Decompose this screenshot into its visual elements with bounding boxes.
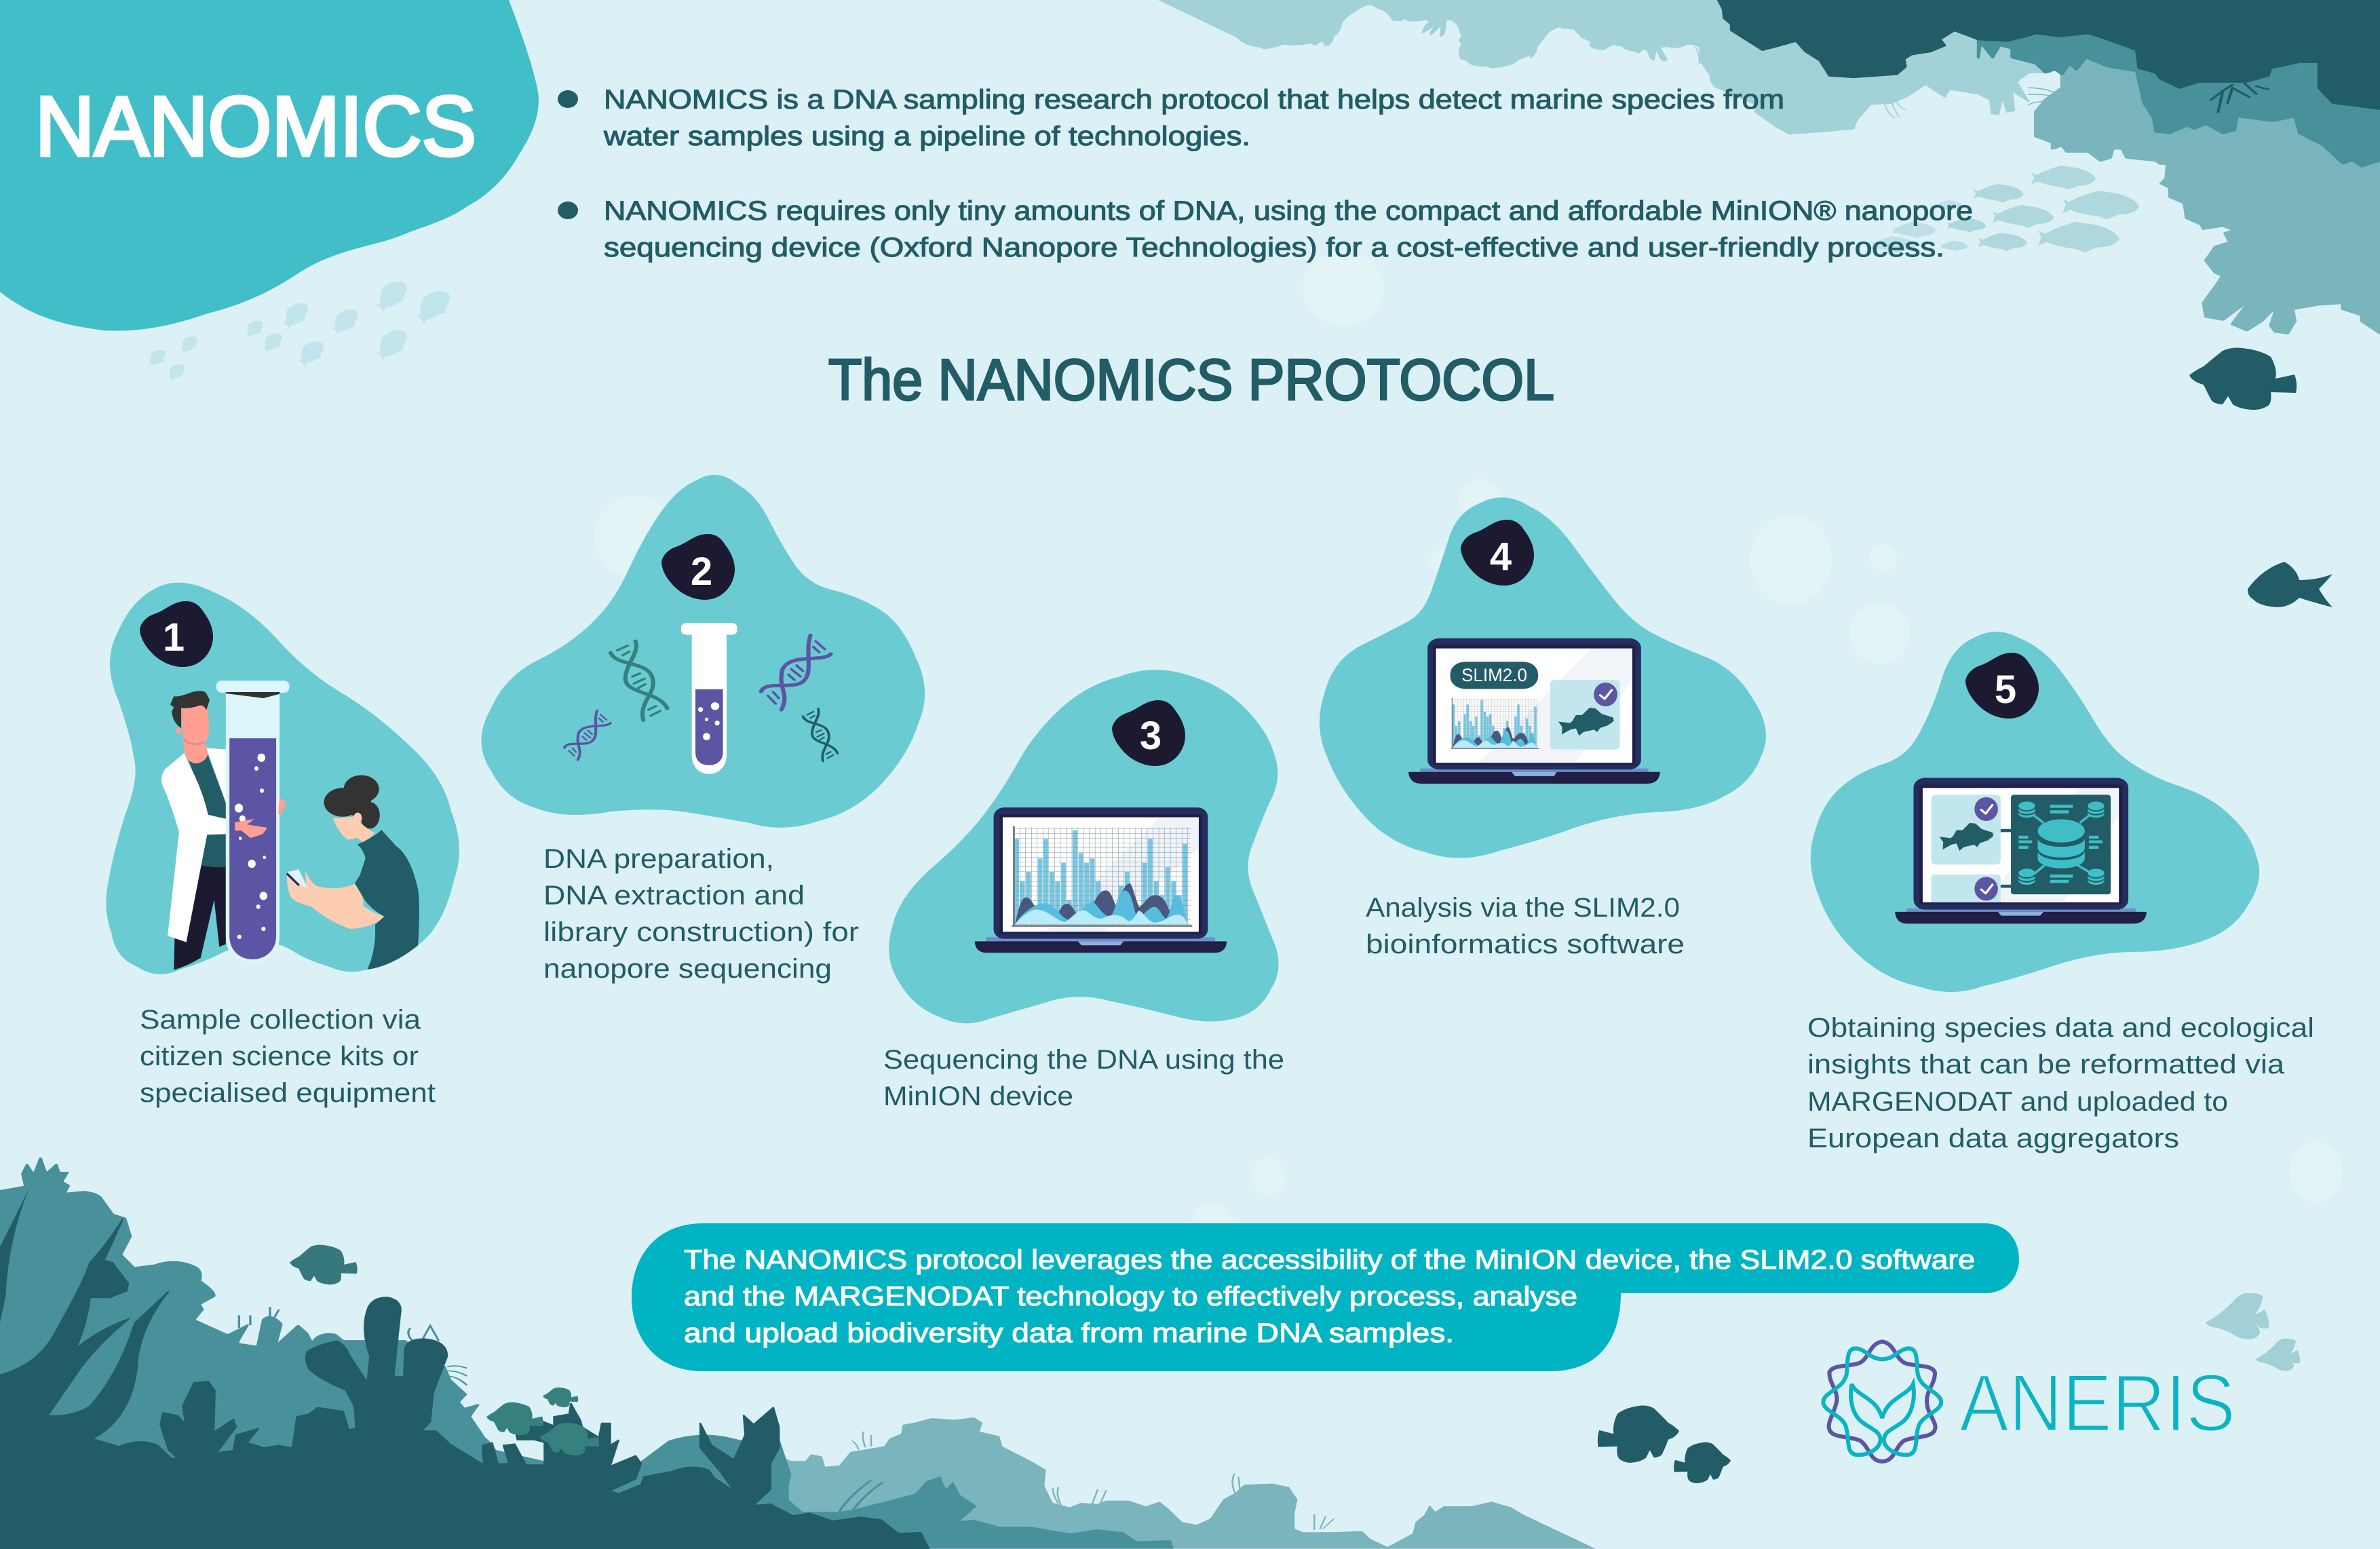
coral layer: fringes and seaweed xyxy=(1695,45,2153,118)
illustration: DNA and test tube xyxy=(564,623,837,774)
blob 5 xyxy=(1815,636,2255,988)
step 4 xyxy=(1324,501,1762,854)
caption 5: Obtaining species data and ecological xyxy=(1807,1013,2314,1043)
caption 3: MinION device xyxy=(883,1082,1073,1111)
step 3 xyxy=(893,674,1275,1019)
ANERIS logo xyxy=(1823,1341,2235,1461)
coral layer: light xyxy=(746,1417,1596,1549)
bullet marker xyxy=(558,202,578,219)
reef fish xyxy=(486,1388,599,1455)
logo wordmark: ANERIS xyxy=(1959,1358,2235,1449)
step 1 xyxy=(110,587,455,970)
caption 1: Sample collection via xyxy=(140,1005,421,1035)
number badge 3: 3 xyxy=(1140,714,1162,758)
illustration: scientist and test tube xyxy=(161,681,290,970)
callout text xyxy=(684,1245,1975,1348)
caption 1: citizen science kits or xyxy=(140,1041,419,1071)
caption 4 xyxy=(1366,893,1685,959)
laptop with SLIM2.0 analysis: SLIM2.0 xyxy=(1461,665,1527,685)
step 2 xyxy=(486,479,921,824)
fish: dark pair xyxy=(1598,1406,1731,1483)
callout panel xyxy=(632,1223,2019,1371)
bullet text 1: water samples using a pipeline of technologies. xyxy=(603,121,1250,151)
coral layer: dark xyxy=(1719,0,2380,109)
bullet marker xyxy=(558,90,578,108)
fish school: top left xyxy=(145,274,457,384)
caption 3: Sequencing the DNA using the xyxy=(883,1045,1284,1075)
callout shape xyxy=(632,1223,2019,1371)
fish: dark right xyxy=(2248,562,2333,607)
caption 1 xyxy=(140,1005,436,1108)
caption 2: nanopore sequencing xyxy=(543,954,832,984)
caption 4: Analysis via the SLIM2.0 xyxy=(1366,893,1680,923)
caption 5: insights that can be reformatted via xyxy=(1807,1050,2285,1079)
caption 5 xyxy=(1807,1013,2314,1153)
fish: light pair xyxy=(2206,1293,2300,1371)
laptop with SLIM2.0 analysis xyxy=(1408,638,1660,784)
bullet text 2 xyxy=(558,196,1973,263)
bubbles xyxy=(595,251,2342,1239)
caption 2: DNA extraction and xyxy=(543,881,805,911)
fish: teal left xyxy=(290,1245,358,1284)
caption 2: DNA preparation, xyxy=(543,844,774,874)
coral layer: mid xyxy=(0,1158,788,1549)
number badge 4 xyxy=(1461,520,1534,586)
caption 2 xyxy=(543,844,859,984)
caption 5: European data aggregators xyxy=(1807,1124,2179,1153)
dna helix teal large xyxy=(611,641,667,720)
bullet text 1: NANOMICS is a DNA sampling research protocol that helps detect marine species from xyxy=(604,85,1784,115)
caption 4: bioinformatics software xyxy=(1366,930,1685,959)
callout text: and the MARGENODAT technology to effectively process, analyse xyxy=(684,1282,1577,1312)
number badge 1 xyxy=(140,601,213,667)
coral layer: mid mound xyxy=(746,1434,1174,1549)
coral layer: mid blue xyxy=(2036,0,2380,333)
laptop with sequencing chart xyxy=(975,807,1227,953)
step 5 xyxy=(1815,636,2255,988)
coral layer: dark seaweed and rocks xyxy=(0,1188,929,1549)
coral: bottom reef xyxy=(0,1158,1596,1549)
coral layer: lightest top xyxy=(1159,0,2060,134)
title blob xyxy=(0,0,539,331)
callout text: and upload biodiversity data from marine DNA samples. xyxy=(684,1318,1454,1348)
callout text: The NANOMICS protocol leverages the accessibility of the MinION device, the SLIM2.0 software xyxy=(684,1245,1975,1275)
number badge 1: 1 xyxy=(163,615,185,659)
title panel xyxy=(0,0,539,331)
bullet text 2: sequencing device (Oxford Nanopore Technologies) for a cost-effective and user-friendly process. xyxy=(604,233,1944,263)
dna helix purple small xyxy=(564,710,611,760)
number badge 2 xyxy=(661,534,735,600)
number badge 5: 5 xyxy=(1995,668,2016,712)
blob 1 xyxy=(110,587,455,970)
caption 3 xyxy=(883,1045,1284,1111)
blob 3 xyxy=(893,674,1275,1019)
blob 4 xyxy=(1324,501,1762,854)
bullet text 1 xyxy=(558,85,1784,151)
number badge 3 xyxy=(1112,700,1185,766)
caption 5: MARGENODAT and uploaded to xyxy=(1807,1087,2228,1117)
dna helix teal small xyxy=(803,709,837,761)
title: NANOMICS xyxy=(35,80,476,174)
heading: The NANOMICS PROTOCOL xyxy=(828,348,1554,413)
caption 1: specialised equipment xyxy=(140,1078,436,1108)
illustration: woman with phone xyxy=(287,775,419,970)
laptop with database xyxy=(1895,778,2147,923)
logo mark xyxy=(1823,1341,1941,1461)
fish school: top right xyxy=(1870,166,2139,253)
bullet text 2: NANOMICS requires only tiny amounts of DNA, using the compact and affordable MinION® nanopore xyxy=(604,196,1973,226)
fish: dark top right xyxy=(2189,347,2297,410)
number badge 2: 2 xyxy=(691,550,712,594)
blob 2 xyxy=(486,479,921,824)
test tube xyxy=(681,623,737,774)
coral layer: teal xyxy=(1978,0,2380,167)
coral: top right reef xyxy=(1159,0,2380,333)
caption 2: library construction) for xyxy=(543,917,859,947)
number badge 4: 4 xyxy=(1490,535,1512,579)
dna helix purple large xyxy=(761,635,831,710)
coral layer: seaweed xyxy=(2211,83,2268,112)
number badge 5 xyxy=(1965,653,2039,719)
